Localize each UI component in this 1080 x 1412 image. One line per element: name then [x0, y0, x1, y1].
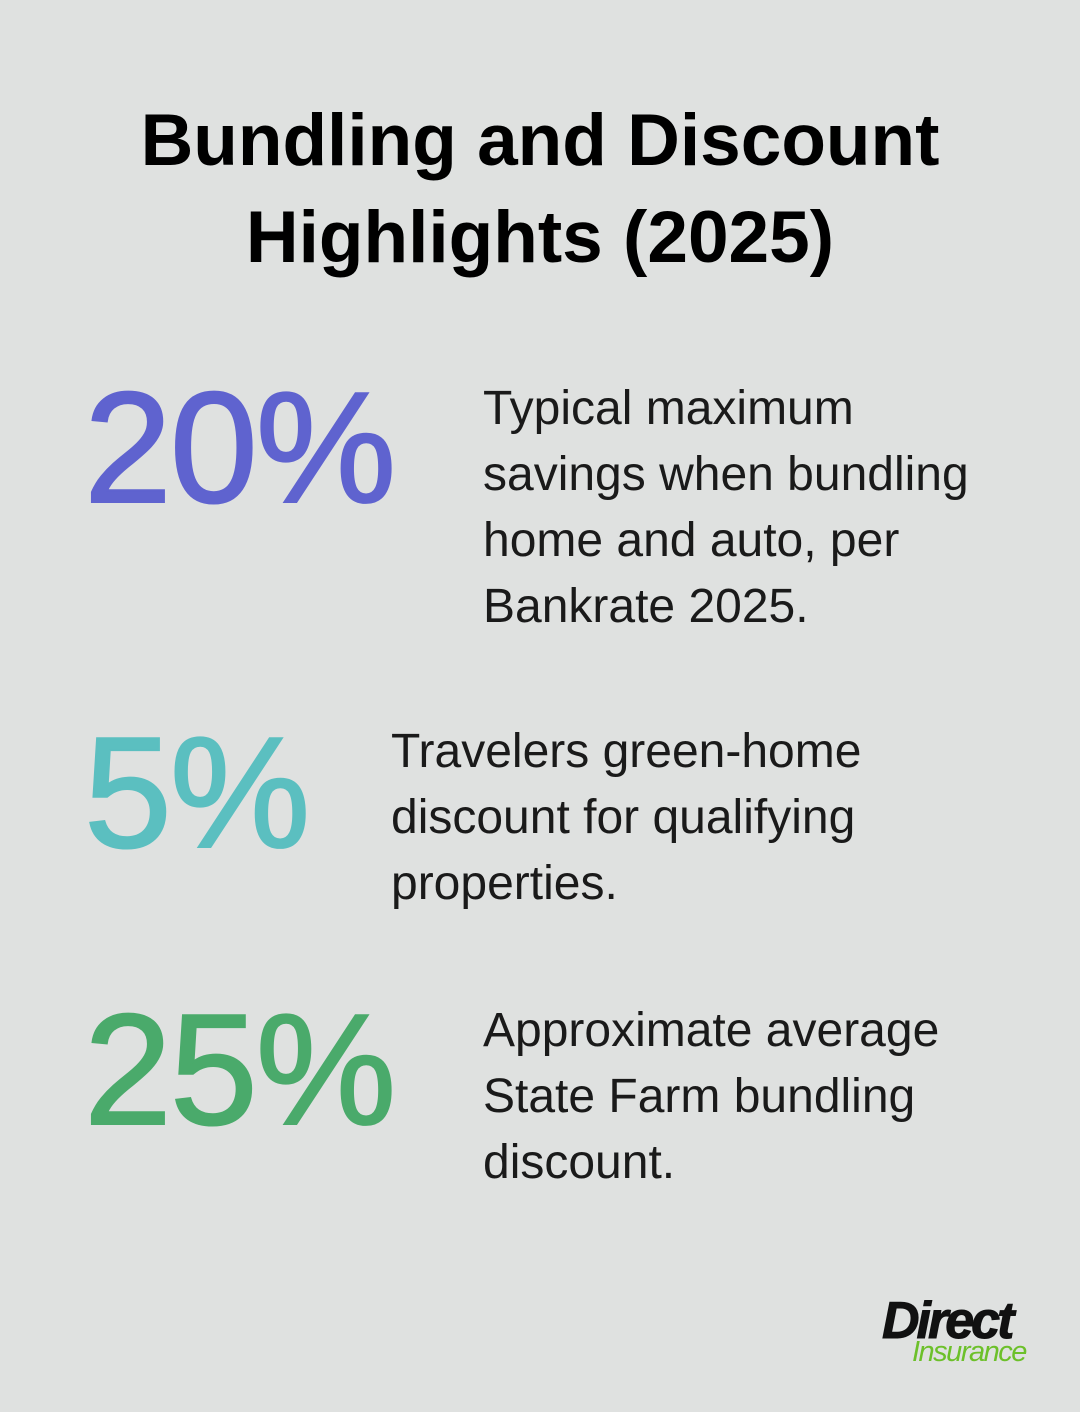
- text: 5% description: Travelers green-home: [391, 725, 861, 778]
- text: 20% description: Typical maximum: [483, 382, 854, 435]
- logo: Direct Insurance: Direct: [882, 1292, 1011, 1350]
- text: 5% description: discount for qualifying: [391, 791, 855, 844]
- text: 20% description: Bankrate 2025.: [483, 580, 809, 633]
- text: 25% description: Approximate average: [483, 1004, 939, 1057]
- text: 25% description: State Farm bundling: [483, 1070, 915, 1123]
- stat: 20%: 20%: [84, 360, 394, 536]
- stat: 5%: 5%: [84, 705, 308, 881]
- title: [141, 100, 939, 278]
- title: Bundling and Discount: [141, 100, 939, 181]
- logo: Direct Insurance: [882, 1292, 1026, 1368]
- text: 25% description: discount.: [483, 1136, 675, 1189]
- text: 20% description: home and auto, per: [483, 514, 899, 567]
- text: 5% description: [391, 725, 861, 910]
- text: 20% description: [483, 382, 969, 633]
- logo: Direct Insurance: Insurance: [912, 1336, 1026, 1368]
- text: 5% description: properties.: [391, 857, 618, 910]
- stat: 25%: 25%: [84, 982, 394, 1158]
- text: 25% description: [483, 1004, 939, 1189]
- title: Highlights (2025): [246, 197, 834, 278]
- text: 20% description: savings when bundling: [483, 448, 969, 501]
